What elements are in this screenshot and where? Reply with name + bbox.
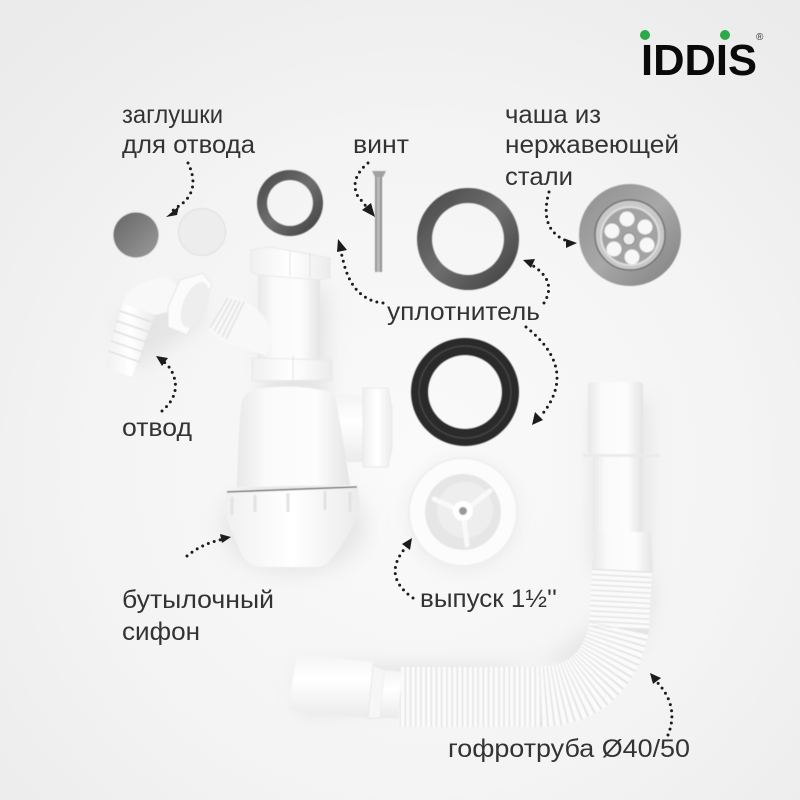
strainer bowl: [579, 184, 681, 286]
black gasket: [411, 338, 519, 446]
arrows: [162, 163, 672, 735]
cap: dark plug: [114, 212, 158, 258]
label: бутылочный сифон: [122, 586, 274, 646]
logo: ®: [756, 32, 764, 43]
label: чаша из нержавеющей стали: стали: [505, 163, 573, 191]
steel gasket: [417, 188, 519, 290]
soft shadows: [115, 285, 655, 715]
arrow: drain elbow: [162, 360, 175, 411]
arrow: gasket top: [340, 248, 383, 303]
arrow: siphon: [187, 539, 224, 556]
gasket ring top: [257, 170, 323, 236]
label: заглушки для отвода: для отвода: [122, 131, 255, 159]
logo: IDDIS: [641, 36, 757, 85]
screw: [372, 171, 386, 272]
arrow: black gasket: [526, 327, 557, 417]
label: отвод: отвод: [122, 414, 192, 442]
arrow: hose: [655, 680, 672, 735]
arrow: outlet: [395, 545, 413, 598]
label: чаша из нержавеющей стали: нержавеющей: [505, 131, 679, 159]
arrow: steel gasket: [530, 264, 549, 303]
outlet: [409, 458, 517, 566]
cap: light plug: [178, 208, 226, 256]
label: чаша из нержавеющей стали: [505, 101, 679, 191]
label: бутылочный сифон: сифон: [122, 618, 200, 646]
arrow: bowl: [546, 192, 570, 242]
label: бутылочный сифон: бутылочный: [122, 586, 274, 614]
arrowheads: [156, 203, 661, 684]
label: выпуск: выпуск 1½'': [420, 585, 557, 613]
label: заглушки для отвода: заглушки: [122, 101, 223, 129]
arrow: plugs: [172, 163, 193, 211]
label: гофротруба: гофротруба Ø40/50: [448, 735, 690, 763]
label: чаша из нержавеющей стали: чаша из: [505, 101, 601, 129]
label: уплотнитель: уплотнитель: [387, 298, 540, 326]
elbow drain branch: [105, 273, 215, 377]
label: заглушки для отвода: [122, 101, 255, 159]
arrow: screw: [355, 163, 369, 210]
bottle siphon: [208, 247, 392, 567]
label: винт: винт: [353, 131, 410, 159]
corrugated hose: [288, 382, 660, 718]
